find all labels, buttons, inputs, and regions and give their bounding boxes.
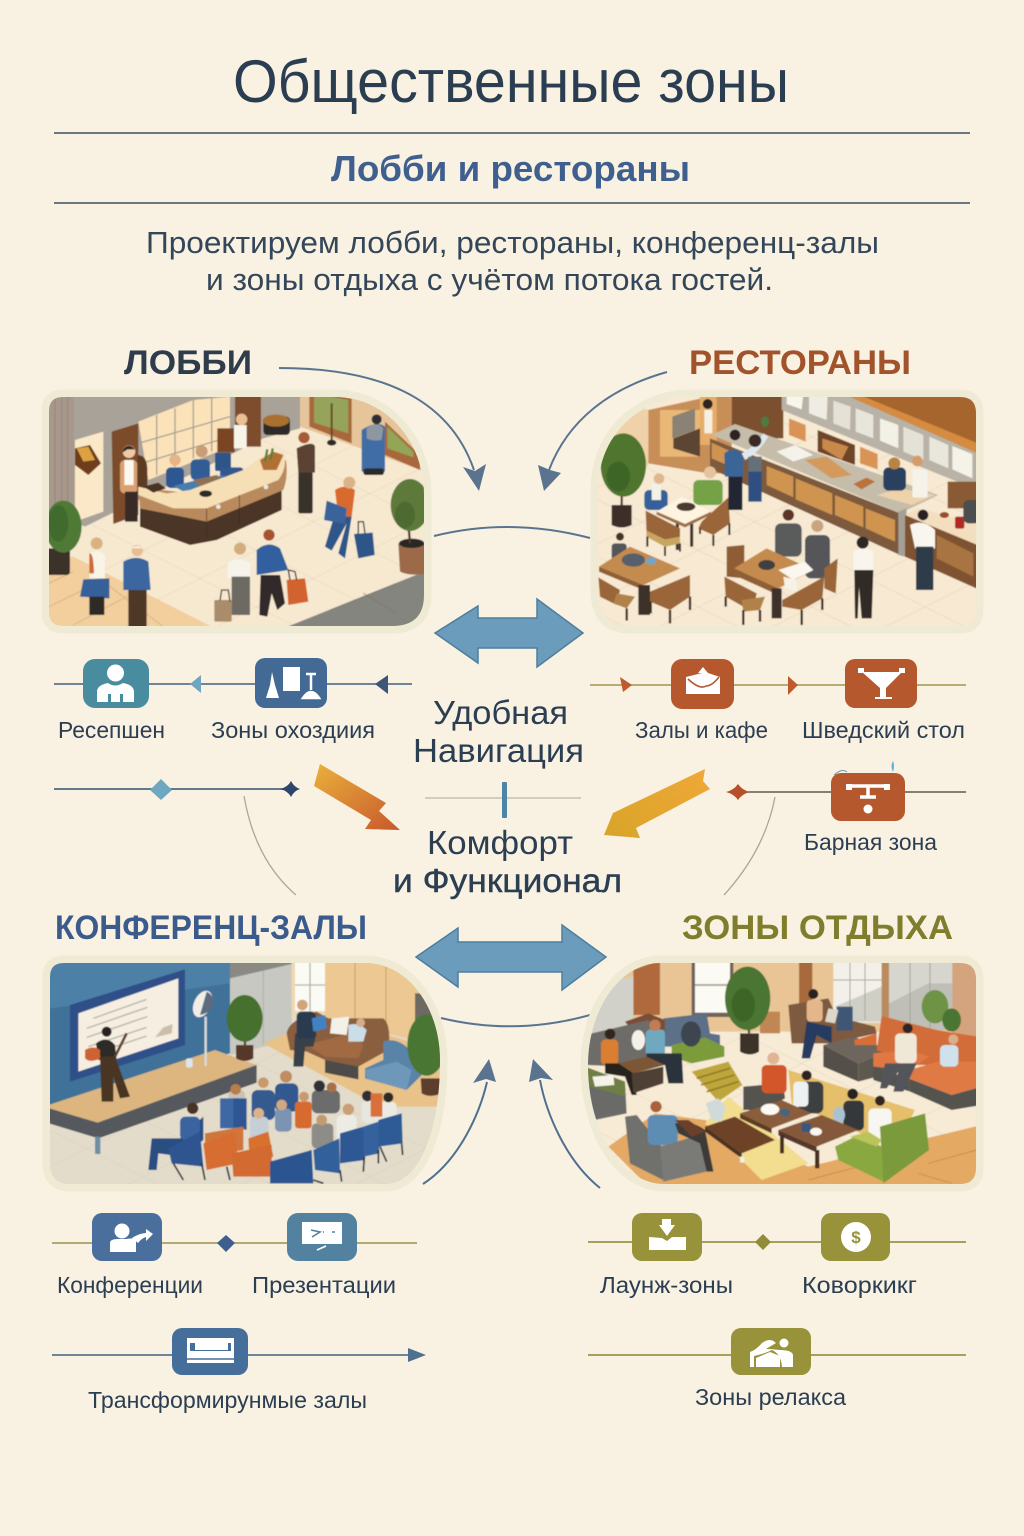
double arrow: bottom (416, 925, 606, 990)
diamond marker (755, 1234, 771, 1250)
panel: restaurant illustration (592, 392, 982, 632)
label: Барная зона (804, 829, 937, 855)
intro text: Проектируем лобби, рестораны, конференц-залы (146, 225, 879, 260)
curved arrow: lobby to centre (279, 368, 486, 491)
projection screen (70, 969, 185, 1082)
centre text: comfort (393, 824, 622, 899)
staff behind counter (883, 467, 906, 491)
centre divider (502, 782, 507, 818)
green-seat sofa (663, 1013, 724, 1063)
double arrow: top (435, 599, 583, 667)
table one (644, 466, 730, 556)
item: lounge (600, 1213, 733, 1298)
waiter one (853, 537, 873, 618)
dark coffee table (823, 1037, 890, 1082)
green sofa (835, 1113, 929, 1183)
heading: lobby: ЛОББИ (124, 344, 252, 382)
reception desk (140, 488, 282, 545)
icon: presentations (287, 1213, 357, 1261)
yellow sofa and group (743, 1052, 915, 1140)
centre text: comfort: Комфорт (427, 824, 573, 861)
centre text: navigation: Удобная (433, 694, 568, 731)
orange arrow: left (314, 764, 400, 830)
row: lobby lower connector (54, 779, 300, 800)
presenter (85, 1027, 130, 1102)
icon: coworking: $ (851, 1228, 861, 1247)
label: Зоны релакса (695, 1384, 846, 1410)
icon: bar (831, 761, 905, 821)
icon: conferences (92, 1213, 162, 1261)
tree (227, 995, 263, 1061)
grey armchair with person (625, 1101, 713, 1182)
label: Трансформирунмые залы (88, 1387, 367, 1413)
icon: reception person (83, 659, 149, 708)
staff and guests (298, 472, 313, 513)
centre text: comfort: и Функционал (393, 862, 622, 899)
row: relax connector (588, 1354, 966, 1356)
item: buffet (802, 659, 965, 743)
audience (148, 1071, 403, 1183)
item: reception (58, 659, 165, 743)
person at laptop (788, 989, 877, 1058)
guests standing at counter (724, 416, 769, 510)
orange arrow: right (604, 769, 710, 838)
arrow marker (190, 675, 201, 693)
item: coworking (802, 1213, 917, 1298)
brown sofa (287, 1000, 389, 1079)
people at table three (775, 509, 830, 578)
blue armchair (365, 1040, 427, 1090)
left sofa group (585, 1013, 683, 1095)
panel: relax zone illustration (582, 957, 982, 1193)
icon: buffet (845, 659, 917, 708)
label: Шведский стол (802, 717, 965, 743)
waiter two (910, 510, 935, 590)
row: lounge connector (588, 1234, 966, 1250)
item: halls and cafe (635, 659, 768, 743)
panel: lobby illustration (43, 392, 430, 632)
icon: cafe (671, 659, 734, 709)
star marker (726, 784, 750, 800)
intro text (146, 225, 879, 297)
row: reception and waiting connector (54, 675, 412, 694)
icon: relax (731, 1328, 811, 1375)
label: Лаунж-зоны (600, 1272, 733, 1298)
item: transformable halls (88, 1328, 367, 1413)
intro text: и зоны отдыха с учётом потока гостей. (206, 262, 773, 297)
orange sofa (854, 990, 982, 1110)
diamond marker (150, 779, 172, 800)
curved arrow: relax to centre (529, 1059, 600, 1188)
tree (725, 967, 770, 1054)
arrow marker (620, 677, 632, 692)
arrow (408, 1348, 426, 1362)
wood tables (705, 1098, 858, 1168)
row: bar connector (726, 784, 966, 800)
buffet counter (712, 424, 938, 513)
plants (49, 500, 82, 576)
label: Ресепшен (58, 717, 165, 743)
people behind desk (120, 460, 137, 493)
icon: lounge (632, 1213, 702, 1261)
label: Залы и кафе (635, 717, 768, 743)
yellow lounge chair (692, 1062, 742, 1102)
icon: waiting zones (255, 658, 327, 708)
icon: transformable hall (172, 1328, 248, 1375)
item: waiting zones (211, 658, 375, 743)
heading: relax zones: ЗОНЫ ОТДЫХА (682, 909, 953, 947)
label: Зоны охоздиия (211, 717, 375, 743)
item: conferences (57, 1213, 203, 1298)
stage (43, 1050, 257, 1123)
star marker (280, 781, 300, 797)
diamond marker (217, 1235, 235, 1252)
label: Презентации (252, 1272, 396, 1298)
item: relax zones (695, 1328, 846, 1410)
subtitle: Лобби и рестораны (331, 148, 690, 189)
curved arrow: conference to centre (423, 1059, 496, 1184)
item: bar zone (804, 761, 937, 855)
heading: restaurants: РЕСТОРАНЫ (689, 344, 911, 382)
table three (724, 545, 838, 625)
label: Коворкикг (802, 1272, 917, 1298)
row: restaurant connector (590, 676, 966, 695)
stage lamp (186, 988, 216, 1068)
arrow marker (375, 675, 388, 694)
heading: conference halls: КОНФЕРЕНЦ-ЗАЛЫ (55, 909, 367, 947)
centre text: navigation (413, 694, 584, 769)
right tree (406, 1014, 440, 1096)
table two (598, 533, 690, 623)
row: conference connector (52, 1235, 417, 1252)
title: Общественные зоны (233, 48, 789, 115)
left armchair (585, 1067, 627, 1120)
item: presentations (252, 1213, 396, 1298)
centre text: navigation: Навигация (413, 732, 584, 769)
curved arrow: restaurants to centre (538, 372, 667, 491)
label: Конференции (57, 1272, 203, 1298)
panel: conference illustration (43, 957, 450, 1193)
row: transformable halls connector (52, 1348, 426, 1362)
tree (601, 433, 646, 527)
arrow marker (788, 676, 798, 695)
